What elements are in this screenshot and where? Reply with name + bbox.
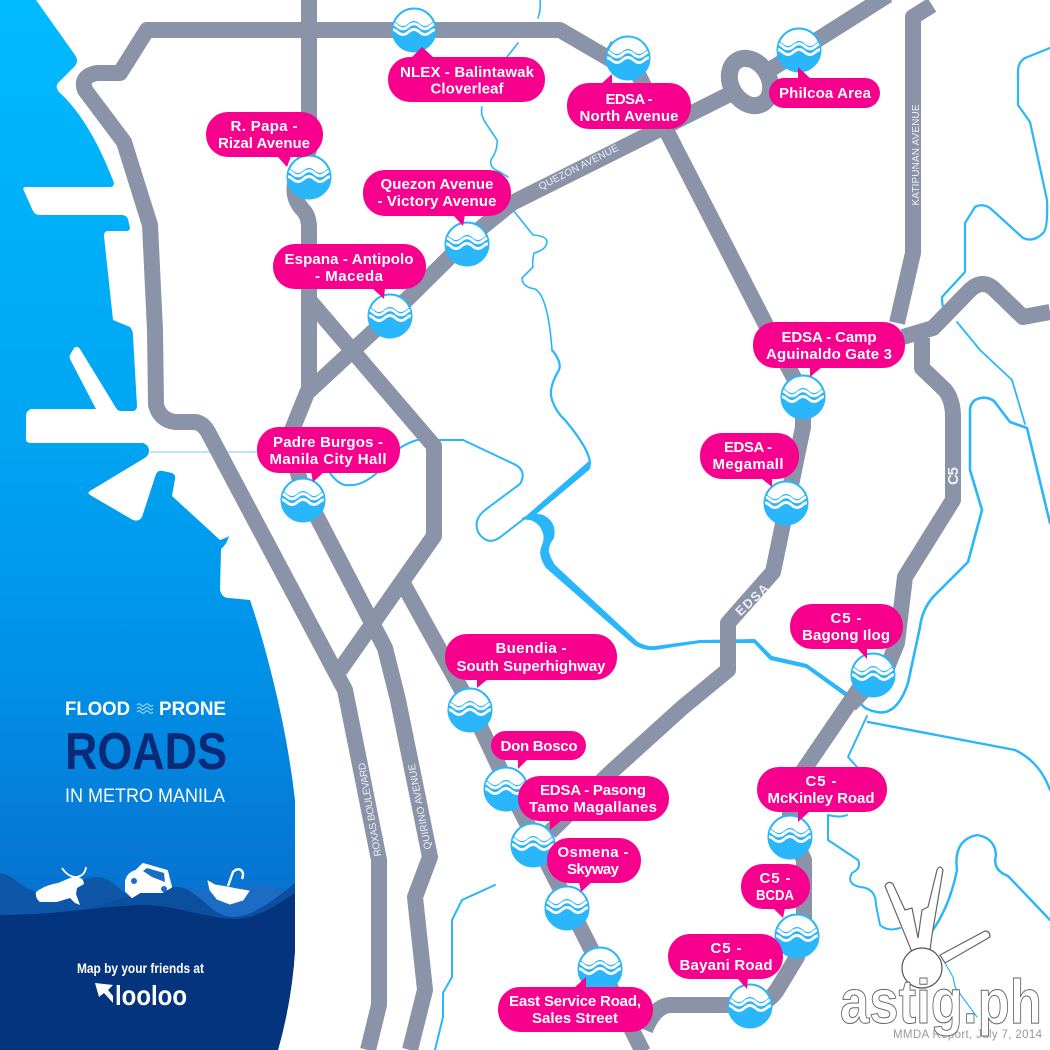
label: C5 - McKinley Road <box>757 767 887 822</box>
label: Osmena - Skyway <box>547 838 641 892</box>
label: EDSA - Megamall: EDSA - <box>724 439 772 456</box>
label: R. Papa - Rizal Avenue: R. Papa - <box>230 118 298 135</box>
watermark: astig.ph logo <box>840 867 1042 1037</box>
road: Katipunan Avenue <box>897 5 932 323</box>
label: C5 - Bagong Ilog <box>790 604 903 659</box>
logo: looloo <box>95 980 187 1011</box>
label: Buendia - South Superhighway: South Superhighway <box>456 658 606 675</box>
label: Padre Burgos - Manila City Hall: Manila City Hall <box>270 451 386 468</box>
road: Philcoa roundabout <box>721 51 779 113</box>
river: Pasig main <box>330 440 525 541</box>
label: C5 - Bayani Road: Bayani Road <box>680 957 772 974</box>
river: Marikina upper <box>942 48 1050 309</box>
label: EDSA - Camp Aguinaldo Gate 3 <box>753 322 905 377</box>
title line: Roads: ROADS <box>65 723 227 781</box>
label: NLEX - Balintawak Cloverleaf <box>388 47 545 102</box>
river: Pasig wide bend <box>522 514 848 697</box>
label: East Service Road, Sales Street: Sales Street <box>532 1010 618 1027</box>
label: Padre Burgos - Manila City Hall: Padre Burgos - <box>273 434 383 451</box>
label: EDSA - Pasong Tamo Magallanes: EDSA - Pasong <box>540 782 646 799</box>
label: Espana - Antipolo - Maceda: - Maceda <box>315 268 384 285</box>
label: Don Bosco <box>491 731 586 769</box>
river: southwest stream <box>435 885 495 1050</box>
icon: cow <box>36 867 86 905</box>
label: Quezon Avenue - Victory Avenue: - Victory Avenue <box>378 193 496 210</box>
label: Quezon Avenue - Victory Avenue: Quezon Avenue <box>380 176 494 193</box>
river: far southeast <box>933 835 1050 930</box>
label: Espana - Antipolo - Maceda: Espana - Antipolo <box>284 251 414 268</box>
label: R. Papa - Rizal Avenue: Rizal Avenue <box>218 135 310 152</box>
river: Marikina thin link <box>957 322 1025 424</box>
label: NLEX - Balintawak Cloverleaf: Cloverleaf <box>430 80 504 98</box>
river: branch east <box>868 722 1050 790</box>
river: San Juan tributary <box>482 0 552 350</box>
road name: C5: C5 <box>945 467 962 485</box>
road: Rizal Avenue and Quirino Avenue <box>292 0 430 1050</box>
source note: MMDA Report, July 7, 2014 <box>893 1029 1043 1041</box>
label: Don Bosco: Don Bosco <box>500 738 578 755</box>
label: Padre Burgos - Manila City Hall <box>257 427 400 482</box>
label: EDSA - Pasong Tamo Magallanes: Tamo Magallanes <box>529 799 657 816</box>
label: C5 - BCDA <box>741 864 810 918</box>
label: EDSA - Pasong Tamo Magallanes <box>518 776 669 830</box>
title line: In Metro Manila: IN METRO MANILA <box>65 786 225 807</box>
title line: Flood Prone <box>65 698 226 720</box>
icon: umbrella <box>208 869 249 904</box>
label: Espana - Antipolo - Maceda <box>273 244 426 299</box>
road: EDSA <box>550 48 803 832</box>
road name: Quezon Avenue: QUEZON AVENUE <box>537 143 621 193</box>
label: EDSA - Camp Aguinaldo Gate 3: Aguinaldo Gate 3 <box>766 346 892 363</box>
sea: Manila Bay coastline <box>0 0 300 1050</box>
label: R. Papa - Rizal Avenue <box>206 112 323 167</box>
road: Quezon Avenue <box>309 0 888 391</box>
label: East Service Road, Sales Street: East Service Road, <box>509 993 641 1010</box>
label: C5 - Bagong Ilog: Bagong Ilog <box>802 627 890 644</box>
label: C5 - Bayani Road: C5 - <box>710 940 742 957</box>
label: EDSA - Megamall: Megamall <box>712 456 784 473</box>
label: C5 - McKinley Road: C5 - <box>806 773 836 790</box>
title line: Flood Prone: FLOOD <box>65 698 130 720</box>
road name: Roxas Boulevard: ROXAS BOULEVARD <box>357 762 384 857</box>
road name: Katipunan Avenue: KATIPUNAN AVENUE <box>911 104 922 206</box>
label: NLEX - Balintawak Cloverleaf: NLEX - Balintawak <box>400 64 535 81</box>
label: Osmena - Skyway: Osmena - <box>558 844 628 861</box>
road: diagonal link <box>309 300 434 670</box>
label: EDSA - North Avenue <box>567 74 691 129</box>
label: EDSA - North Avenue: North Avenue <box>580 108 678 125</box>
icon: car <box>126 864 171 897</box>
flood markers <box>276 8 900 1036</box>
label: Buendia - South Superhighway: Buendia - <box>496 640 566 657</box>
label: C5 - Bagong Ilog: C5 - <box>830 610 862 627</box>
label: C5 - Bayani Road <box>668 934 783 989</box>
label: C5 - BCDA: BCDA <box>756 887 794 904</box>
road: South Superhighway <box>400 578 643 1050</box>
road name: Quirino Avenue: QUIRINO AVENUE <box>407 762 434 850</box>
road name: EDSA: EDSA <box>732 580 772 619</box>
title <box>65 698 227 807</box>
title line: Flood Prone: PRONE <box>159 698 226 720</box>
road: C5 south part <box>645 680 865 1030</box>
label: C5 - BCDA: C5 - <box>760 870 790 887</box>
road: east connection <box>903 284 1050 337</box>
river: branch south <box>828 716 900 929</box>
label: Buendia - South Superhighway <box>445 634 617 688</box>
river: harbour thin channel <box>150 451 258 453</box>
label: C5 - McKinley Road: McKinley Road <box>768 790 874 807</box>
label: EDSA - North Avenue: EDSA - <box>606 91 652 108</box>
road: NLEX and Roxas Boulevard <box>84 30 620 1050</box>
credit: map by: Map by your friends at <box>77 961 204 976</box>
label: East Service Road, Sales Street <box>498 977 653 1032</box>
label: Osmena - Skyway: Skyway <box>567 861 620 878</box>
river: San Juan lower <box>551 350 590 464</box>
label: Quezon Avenue - Victory Avenue <box>363 170 511 226</box>
river: Marikina lower <box>862 398 1050 712</box>
label: EDSA - Camp Aguinaldo Gate 3: EDSA - Camp <box>782 329 876 346</box>
river: lower taper <box>526 461 590 516</box>
road: C5 north part <box>850 338 953 705</box>
label: EDSA - Megamall <box>700 433 799 487</box>
logo: looloo: looloo <box>115 980 187 1011</box>
label: Philcoa Area <box>769 67 880 108</box>
label: Philcoa Area: Philcoa Area <box>779 85 872 102</box>
river: thin southeast <box>945 963 977 1017</box>
